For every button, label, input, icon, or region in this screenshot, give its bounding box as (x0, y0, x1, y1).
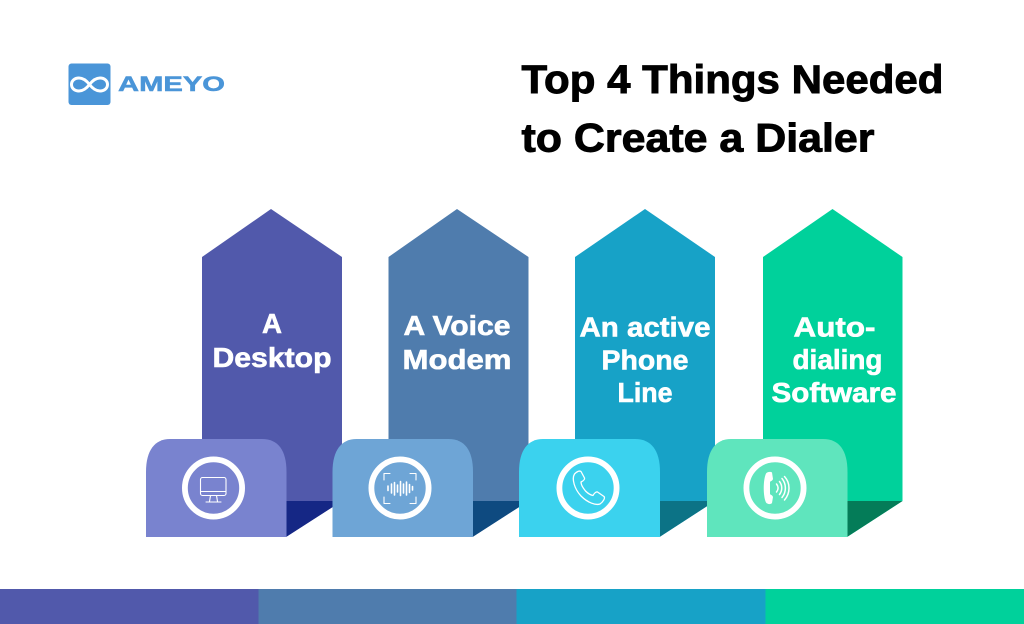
icon: desktop (185, 459, 242, 517)
label 1 (212, 308, 332, 373)
fold 2 (472, 501, 528, 537)
fold 3 (660, 501, 715, 537)
column 4: Auto-dialing Software (707, 209, 902, 537)
fold 4 (847, 501, 902, 537)
label 4: dialing (792, 344, 882, 375)
icon: voice (371, 459, 429, 517)
label 3: Phone (602, 344, 688, 376)
label 4: Software (772, 377, 896, 408)
logo: Ameyo (68, 64, 225, 105)
label 1: A (262, 308, 282, 339)
column 2: A Voice Modem (332, 209, 528, 537)
title: Top 4 Things Needed (522, 58, 944, 102)
card 3 (519, 439, 660, 537)
card 1 (146, 439, 286, 537)
label 2: Modem (402, 344, 512, 375)
title (522, 58, 944, 160)
fold 1 (286, 501, 342, 537)
column 1: A Desktop (146, 209, 342, 537)
icon: call sound (746, 459, 804, 517)
label 4: Auto- (794, 312, 876, 342)
card 2 (332, 439, 473, 537)
column 3: An active Phone Line (519, 209, 715, 537)
label 3: An active (580, 312, 710, 342)
label 2: A Voice (404, 310, 510, 341)
label 1: Desktop (212, 342, 332, 373)
arrow 3 (575, 209, 715, 537)
logo: Ameyo: AMEYO (118, 73, 225, 96)
label 2 (402, 310, 512, 375)
label 4 (772, 312, 896, 408)
arrow 1 (202, 209, 342, 537)
icon: phone (559, 459, 617, 517)
arrow 4 (763, 209, 902, 537)
label 3 (580, 312, 710, 408)
bottom colour band (0, 589, 1024, 624)
label 3: Line (618, 377, 672, 408)
title: to Create a Dialer (522, 116, 874, 160)
card 4 (707, 439, 848, 537)
arrow 2 (388, 209, 528, 537)
